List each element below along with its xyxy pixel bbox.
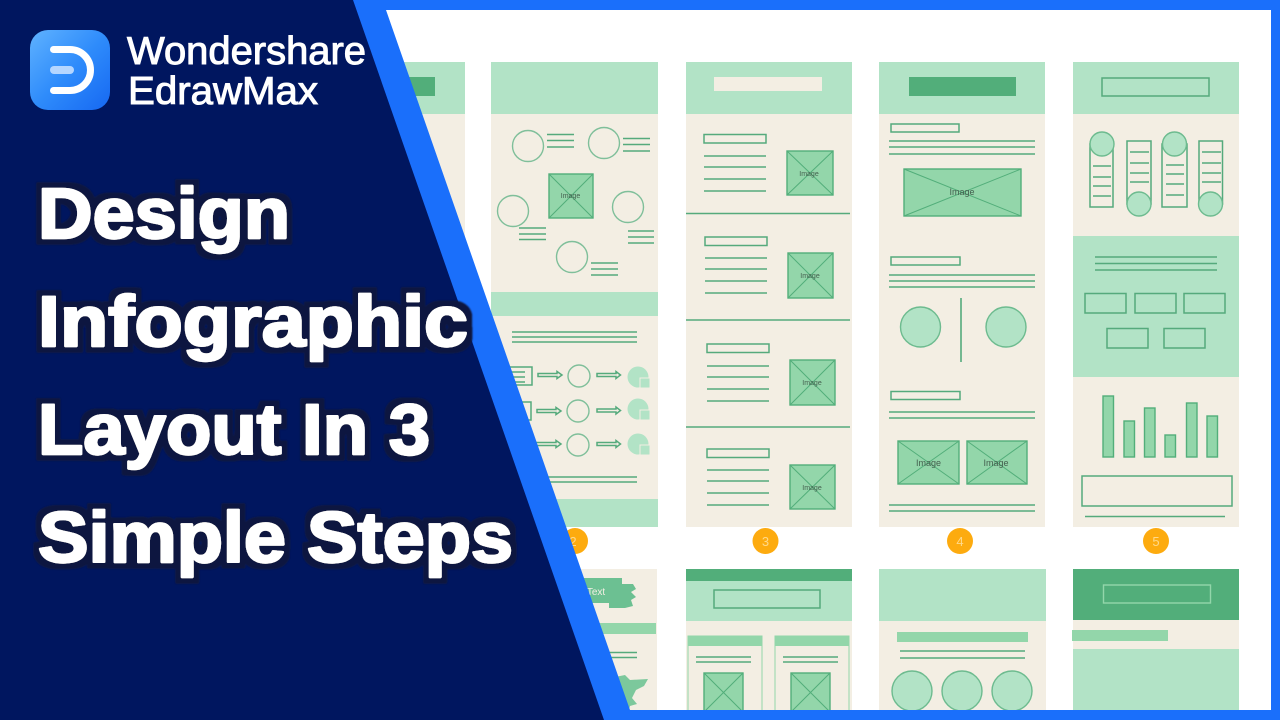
navy diagonal panel bbox=[0, 0, 604, 720]
panel: template 3: Image bbox=[800, 273, 820, 280]
panel: template 2 bbox=[491, 62, 658, 527]
panel: template 6 (map) bbox=[560, 569, 657, 714]
panel: template 4: Image bbox=[983, 458, 1009, 468]
brand name bbox=[127, 30, 366, 113]
step number badges: 5 bbox=[1152, 534, 1160, 549]
title: Infographic bbox=[38, 283, 468, 362]
step number badges: 2 bbox=[569, 534, 577, 549]
step number badges bbox=[562, 528, 1169, 554]
panel: template 3: Image bbox=[802, 485, 822, 492]
step number badges: 3 bbox=[762, 534, 769, 549]
title: Simple Steps bbox=[38, 499, 513, 578]
title bbox=[38, 175, 513, 578]
step number badges: 4 bbox=[956, 534, 964, 549]
panel: template 3: Image bbox=[799, 171, 819, 178]
panel: template 4: Image bbox=[916, 458, 941, 468]
brand name: EdrawMax bbox=[128, 70, 319, 113]
panel: template 2: Image bbox=[561, 193, 580, 200]
panel: template 6 (map): Text bbox=[587, 587, 605, 598]
panel: template 5 bbox=[1073, 62, 1239, 527]
icon: EdrawMax logo bbox=[30, 30, 110, 110]
panel: template 7 bbox=[686, 569, 852, 716]
panel: template 4: Image bbox=[949, 187, 975, 197]
panel: template 3 bbox=[686, 62, 852, 527]
panel: template 9 bbox=[1072, 569, 1239, 716]
title: Design bbox=[38, 175, 290, 254]
panel: template 1 (partly hidden) bbox=[380, 62, 465, 527]
title: Layout In 3 bbox=[38, 391, 430, 470]
panel: template 4 bbox=[879, 62, 1045, 527]
brand name: Wondershare bbox=[127, 30, 366, 73]
panel: template 3: Image bbox=[802, 380, 822, 387]
panel: template 8 bbox=[879, 569, 1046, 716]
